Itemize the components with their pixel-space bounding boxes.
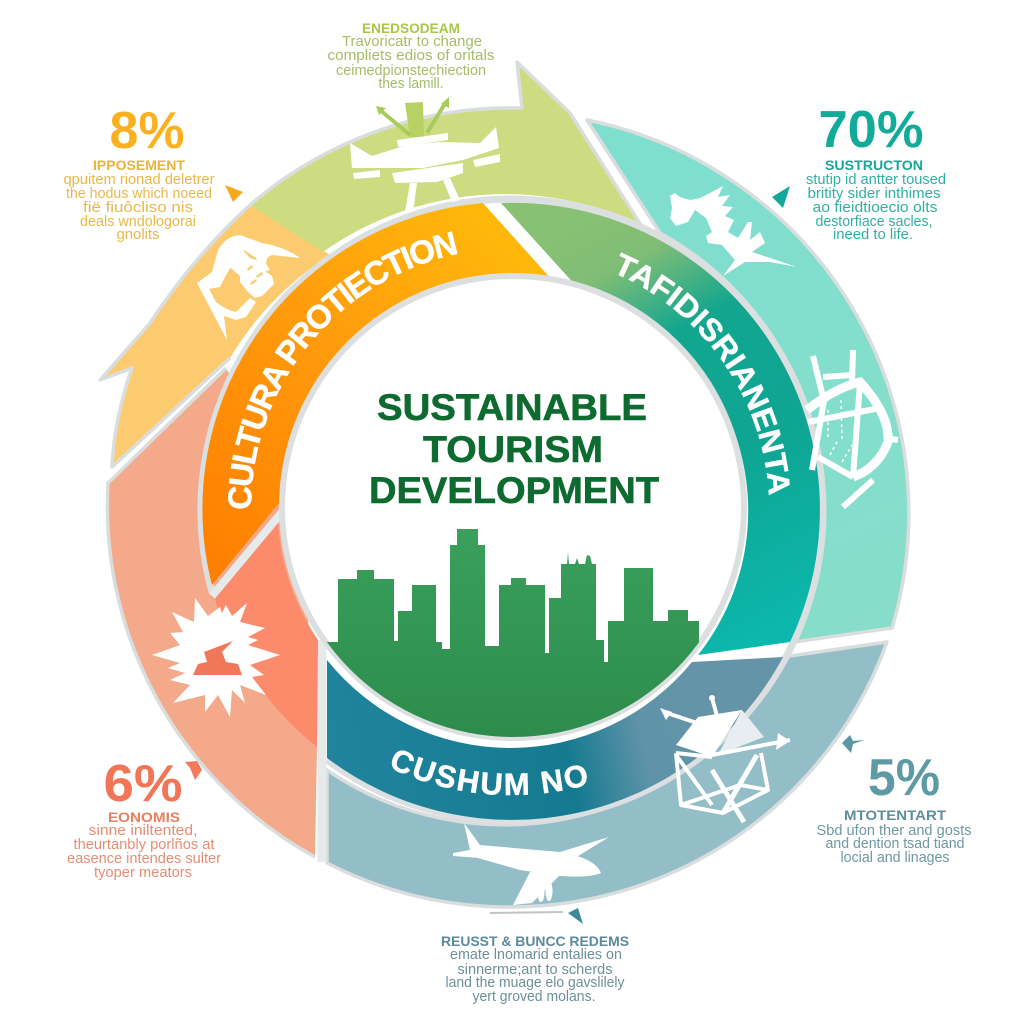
band label: cultural protection: CULTURA PROTIECTION: [228, 231, 458, 509]
icon: ship wheel on mint segment: [807, 350, 898, 507]
middle ring: [202, 202, 820, 820]
callout: 5%: locial and linages: [840, 849, 950, 866]
outer ring: [100, 62, 909, 907]
callout: bottom: REUSST & BUNCC REDEMS: [441, 933, 629, 949]
title: SUSTAINABLE: [377, 387, 647, 428]
band label: blue: CUSHUM NO: [392, 750, 587, 796]
vertical divider at lower left: [318, 640, 326, 862]
callout: 8%: fië fiuôcliso nis: [83, 199, 193, 216]
callout: 6%: 6%: [104, 755, 182, 813]
callout: top: ENEDSODEAM: [362, 20, 460, 36]
marker: top-right triangle: [772, 186, 790, 208]
callout: bottom: land the muage elo gavslilely: [446, 974, 625, 991]
callout: 8%: [64, 102, 214, 243]
callout: 8%: IPPOSEMENT: [93, 157, 185, 173]
segment: blue: [327, 657, 783, 820]
callout: top: Travoricatr to change: [342, 33, 482, 50]
divider between orange and coral: [212, 512, 282, 596]
icon: aircraft on green segment: [350, 97, 500, 212]
outline: peach: [107, 368, 315, 857]
callout: 70%: ao fieidtioecio olts: [812, 199, 938, 216]
callout: 5%: MTOTENTART: [844, 807, 946, 823]
marker: lower-right triangle: [842, 735, 864, 753]
callout: 70%: SUSTRUCTON: [825, 157, 923, 173]
callout: 70%: stutip id antter toused: [806, 171, 946, 188]
marker: top-left triangle: [225, 185, 243, 202]
callout: 70%: britity sider inthimes: [808, 185, 940, 202]
centre circle: [270, 276, 760, 760]
skyline: [326, 529, 699, 737]
icon: house with cube: [660, 695, 790, 822]
callout: 70%: [806, 101, 946, 243]
callout: 6%: [67, 755, 221, 881]
callout: 5%: Sbd ufon ther and gosts: [816, 822, 972, 839]
callout: top: thes lamill.: [378, 75, 444, 92]
callout: 70%: ineed to life.: [833, 226, 913, 243]
callout: top: [328, 20, 494, 92]
callout: 6%: sinne iniltented,: [88, 822, 198, 839]
callout: 6%: tyoper meators: [94, 864, 192, 881]
segment: light blue: [327, 642, 887, 907]
band label: teal: TAFIDISRIANENTA: [618, 252, 790, 496]
callout: bottom: [441, 912, 629, 1005]
callout: 5%: 5%: [868, 749, 940, 807]
segment: mint: [587, 120, 909, 642]
callout: 8%: 8%: [110, 102, 184, 160]
segment: yellow arrow: [100, 205, 330, 467]
marker: lower-left triangle: [185, 761, 202, 780]
callout: 70%: 70%: [818, 101, 924, 159]
callout: 8%: qpuitem rionad deletrer: [64, 171, 214, 188]
title: TOURISM: [423, 429, 603, 470]
icon: dragon on mint segment: [670, 186, 797, 276]
icon: hands on yellow segment: [197, 235, 300, 340]
divider ring between outer and middle bands: [201, 199, 823, 821]
callout: bottom: yert groved molans.: [472, 988, 596, 1005]
segment: coral: [213, 523, 318, 747]
callout: top: compliets edios of oritals: [328, 47, 494, 64]
segment: orange cultural protection: [202, 203, 553, 585]
outline: yellow and green arrows: [100, 62, 641, 467]
callout: bottom: sinnerme;ant to scherds: [458, 961, 612, 978]
callout: top: ceimedpionstechiection: [336, 62, 486, 79]
callout: 6%: theurtanbly porlños at: [74, 836, 215, 853]
callout: 5%: and dention tsad tiand: [826, 835, 964, 852]
title: DEVELOPMENT: [369, 470, 659, 511]
callout: bottom: emate lnomarid entalies on: [450, 946, 622, 963]
marker: bottom triangle: [568, 908, 583, 924]
callout: 8%: the hodus which noeed: [66, 185, 212, 202]
callout: 8%: deals wndologorai: [80, 213, 196, 230]
title: [369, 387, 659, 511]
segment: light green arrow: [250, 62, 641, 252]
segment: peach: [107, 368, 317, 857]
callout: 70%: destorfiace sacles,: [816, 213, 932, 230]
icon: starburst on peach segment: [152, 598, 280, 717]
callout: 6%: easence intendes sulter: [67, 850, 221, 867]
icon: airplane: [453, 823, 609, 905]
segment: teal: [501, 203, 820, 655]
callout: 5%: [816, 749, 972, 866]
callout: 8%: gnolits: [116, 226, 160, 243]
callout: 6%: EONOMIS: [108, 809, 180, 825]
